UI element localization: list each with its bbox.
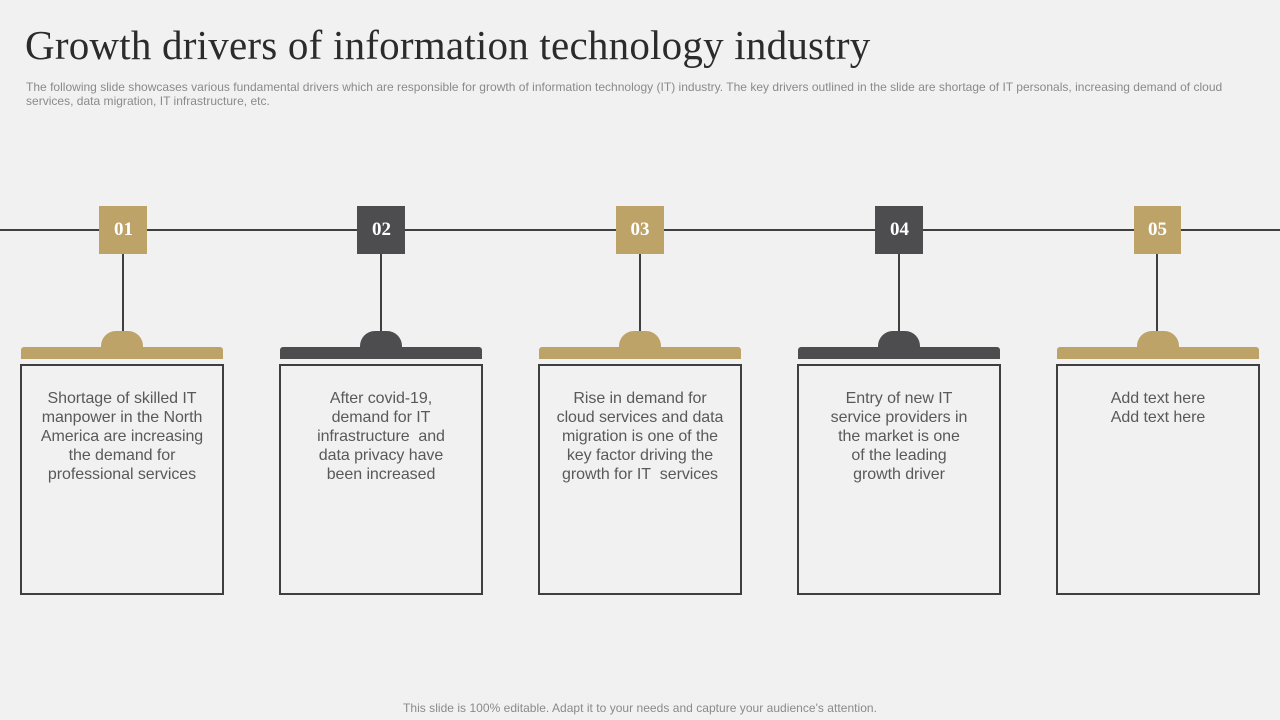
number badge 01 (99, 206, 147, 254)
card 02: demand for IT (332, 409, 430, 426)
subtitle text: services, data migration, IT infrastructure, etc. (26, 94, 270, 108)
card 01: the demand for (69, 447, 175, 464)
card 03: Rise in demand for (573, 390, 707, 407)
card 03: key factor driving the (567, 447, 713, 464)
title: Growth drivers of information technology industry (25, 22, 870, 68)
number badge 02: 02 (372, 219, 391, 240)
subtitle text (26, 80, 1222, 108)
number badge 04: 04 (890, 219, 909, 240)
number badge 04 (875, 206, 923, 254)
timeline line (0, 229, 1280, 231)
card 04 (797, 364, 1001, 595)
connector 02 (380, 254, 382, 332)
card 02: After covid-19, (330, 390, 432, 407)
card 03 (538, 364, 742, 595)
number badge 03 (616, 206, 664, 254)
connector 05 (1156, 254, 1158, 332)
card 01: manpower in the North (42, 409, 202, 426)
card 05: Add text here (1111, 409, 1205, 426)
card 02: been increased (327, 466, 435, 483)
card 02: data privacy have (319, 447, 443, 464)
number badge 02 (357, 206, 405, 254)
connector 03 (639, 254, 641, 332)
card 03: migration is one of the (562, 428, 718, 445)
tab 03 (539, 331, 741, 359)
card 02 (279, 364, 483, 595)
subtitle text: The following slide showcases various fundamental drivers which are responsible for growth of information technology (IT) industry. The key drivers outlined in the slide are shortage of IT personals, increasing demand of cloud (26, 80, 1222, 94)
card 04: Entry of new IT (846, 390, 952, 407)
card 04: of the leading (851, 447, 947, 464)
card 04: growth driver (853, 466, 945, 483)
connector 01 (122, 254, 124, 332)
footer note: This slide is 100% editable. Adapt it to your needs and capture your audience's attention. (403, 701, 877, 715)
card 01 (20, 364, 224, 595)
card 01: America are increasing (41, 428, 203, 445)
number badge 01: 01 (114, 219, 133, 240)
card 01: professional services (48, 466, 196, 483)
card 05 (1056, 364, 1260, 595)
number badge 05: 05 (1148, 219, 1167, 240)
card 04: the market is one (838, 428, 960, 445)
card 03: growth for IT services (562, 466, 718, 483)
card 02: infrastructure and (317, 428, 445, 445)
card 03: cloud services and data (557, 409, 723, 426)
tab 05 (1057, 331, 1259, 359)
number badge 05 (1134, 206, 1181, 254)
card 01: Shortage of skilled IT (48, 390, 196, 407)
tab 02 (280, 331, 482, 359)
tab 01 (21, 331, 223, 359)
card 05: Add text here (1111, 390, 1205, 407)
number badge 03: 03 (630, 219, 650, 240)
card 04: service providers in (831, 409, 967, 426)
connector 04 (898, 254, 900, 332)
tab 04 (798, 331, 1000, 359)
